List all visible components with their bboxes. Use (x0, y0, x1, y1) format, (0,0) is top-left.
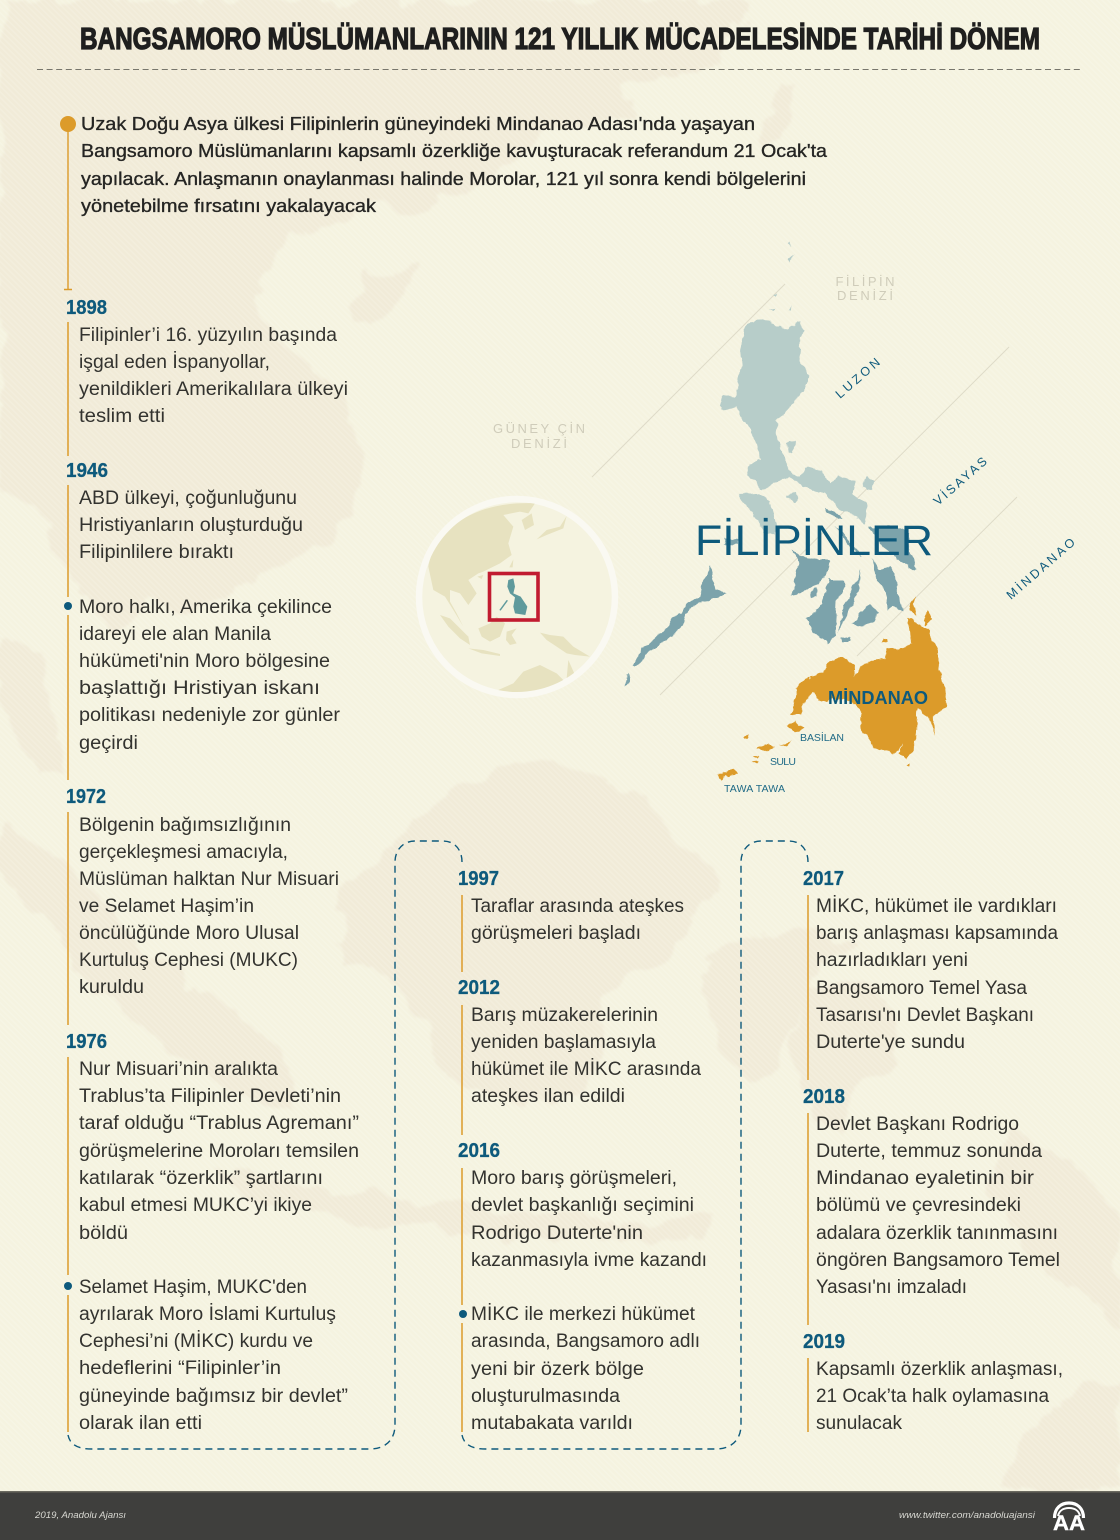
entry 1898: teslim etti (79, 406, 165, 427)
entry 2018 (803, 1086, 1060, 1298)
entry 2017: 2017 (803, 868, 844, 890)
entry 1898 (66, 297, 348, 427)
entry 1976: Nur Misuari’nin aralıkta (79, 1059, 278, 1080)
entry Selamet Haşim: güneyinde bağımsız bir devlet” (79, 1386, 348, 1407)
timeline column 2 (458, 868, 707, 1434)
entry 1946: ABD ülkeyi, çoğunluğunu (79, 488, 297, 509)
entry 2016: Moro barış görüşmeleri, (471, 1168, 677, 1189)
entry 1972: kuruldu (79, 977, 144, 998)
connector: dashed path from second to third column (462, 841, 808, 1449)
entry 2019: 2019 (803, 1331, 845, 1353)
entry 2012: yeniden başlamasıyla (471, 1032, 656, 1053)
entry 2018: Yasası'nı imzaladı (816, 1277, 967, 1298)
entry 2019: sunulacak (816, 1413, 902, 1434)
entry 2012: 2012 (458, 977, 500, 999)
entry 1976: görüşmelerine Moroları temsilen (79, 1141, 359, 1162)
entry MİKC: MİKC ile merkezi hükümet (471, 1304, 696, 1325)
entry 1898: yenildikleri Amerikalılara ülkeyi (79, 379, 348, 400)
inset mini map (499, 578, 527, 615)
entry 2019 (803, 1331, 1063, 1434)
region label: Mindanao rotated: MİNDANAO (1004, 535, 1078, 602)
entry MİKC: mutabakata varıldı (471, 1413, 633, 1434)
entry Selamet Haşim: Cephesi’ni (MİKC) kurdu ve (79, 1331, 313, 1352)
entry Moro halkı (64, 597, 341, 754)
footer credit: 2019, Anadolu Ajansı (34, 1510, 126, 1521)
entry 2017: Tasarısı'nı Devlet Başkanı (816, 1005, 1034, 1026)
entry 2017: Duterte'ye sundu (816, 1032, 965, 1053)
intro text with marker: Bangsamoro Müslümanlarını kapsamlı özerkliğe kavuşturacak referandum 21 Ocak'ta (81, 140, 828, 161)
island labels: SULU (770, 756, 796, 768)
entry 1972 (66, 786, 339, 998)
entry 2012: hükümet ile MİKC arasında (471, 1059, 701, 1080)
entry 2016 (458, 1140, 707, 1271)
entry 1976: böldü (79, 1223, 128, 1244)
red locator frame (490, 574, 538, 620)
timeline column 1 (64, 297, 359, 1434)
sea label: Güney Çin Denizi: GÜNEY ÇİN (493, 421, 585, 436)
entry 2012 (458, 977, 701, 1107)
entry 2017 (803, 868, 1058, 1053)
sea label: Filipin Denizi: FİLİPİN (836, 274, 894, 289)
entry 1946: Filipinlilere bıraktı (79, 542, 234, 563)
entry 2016: 2016 (458, 1140, 500, 1162)
entry 2017: barış anlaşması kapsamında (816, 923, 1058, 944)
entry 1997 (458, 868, 684, 944)
sea label: Filipin Denizi (836, 274, 894, 303)
entry 1946: 1946 (66, 460, 108, 482)
entry 1997: Taraflar arasında ateşkes (471, 896, 684, 917)
entry 1946: Hristiyanların oluşturduğu (79, 515, 303, 536)
entry Selamet Haşim (64, 1277, 348, 1434)
entry 2012: Barış müzakerelerinin (471, 1005, 658, 1026)
entry 2018: Mindanao eyaletinin bir (816, 1168, 1035, 1189)
footer url: www.twitter.com/anadoluajansi (899, 1510, 1036, 1521)
intro text with marker: Uzak Doğu Asya ülkesi Filipinlerin güneyindeki Mindanao Adası'nda yaşayan (81, 113, 755, 134)
intro text with marker: yapılacak. Anlaşmanın onaylanması halinde Morolar, 121 yıl sonra kendi bölgelerini (81, 168, 806, 189)
entry 1972: Bölgenin bağımsızlığının (79, 815, 291, 836)
locator globe (419, 499, 615, 695)
entry 1946 (66, 460, 303, 563)
entry 2017: MİKC, hükümet ile vardıkları (816, 896, 1057, 917)
Mindanao region (718, 597, 947, 781)
sea label: Filipin Denizi: DENİZİ (837, 288, 893, 303)
entry 2018: adalara özerklik tanınmasını (816, 1223, 1058, 1244)
entry 1972: 1972 (66, 786, 106, 808)
entry Selamet Haşim: Selamet Haşim, MUKC'den (79, 1277, 307, 1298)
sea label: Güney Çin Denizi (493, 421, 585, 451)
country label: Filipinler: FİLİPİNLER (695, 517, 933, 565)
footer bar (0, 1491, 1120, 1540)
entry Moro halkı: başlattığı Hristiyan iskanı (79, 678, 320, 699)
entry MİKC: oluşturulmasında (471, 1386, 620, 1407)
sea label: Güney Çin Denizi: DENİZİ (511, 436, 567, 451)
intro text with marker: yönetebilme fırsatını yakalayacak (81, 195, 377, 216)
region label: Luzon: LUZON (833, 355, 883, 401)
entry 2017: hazırladıkları yeni (816, 950, 968, 971)
entry 1972: gerçekleşmesi amacıyla, (79, 842, 288, 863)
entry 1976: 1976 (66, 1031, 107, 1053)
entry 2016: devlet başkanlığı seçimini (471, 1195, 694, 1216)
entry Selamet Haşim: hedeflerini “Filipinler’in (79, 1358, 281, 1379)
entry 2016: kazanmasıyla ivme kazandı (471, 1250, 707, 1271)
entry Moro halkı: geçirdi (79, 733, 138, 754)
intro text with marker (60, 113, 828, 290)
entry 1976: Trablus’ta Filipinler Devleti’nin (79, 1086, 341, 1107)
entry 2017: Bangsamoro Temel Yasa (816, 978, 1027, 999)
entry 2018: Devlet Başkanı Rodrigo (816, 1114, 1019, 1135)
entry 2019: 21 Ocak’ta halk oylamasına (816, 1386, 1049, 1407)
Luzon region (718, 242, 873, 536)
icon: AA logo: AA (1053, 1512, 1085, 1535)
connector: dashed path from first to second column (68, 841, 462, 1449)
Visayas and Palawan (625, 506, 915, 686)
entry 1976 (66, 1031, 359, 1244)
entry Selamet Haşim: olarak ilan etti (79, 1413, 202, 1434)
entry MİKC: yeni bir özerk bölge (471, 1359, 644, 1380)
entry 1976: taraf olduğu “Trablus Agremanı” (79, 1113, 359, 1134)
entry 2018: öngören Bangsamoro Temel (816, 1250, 1060, 1271)
entry 1972: Kurtuluş Cephesi (MUKC) (79, 950, 298, 971)
entry MİKC: arasında, Bangsamoro adlı (471, 1331, 700, 1352)
entry 2018: Duterte, temmuz sonunda (816, 1141, 1042, 1162)
entry Moro halkı: hükümeti'nin Moro bölgesine (79, 651, 330, 672)
entry 1997: 1997 (458, 868, 499, 890)
entry 2019: Kapsamlı özerklik anlaşması, (816, 1359, 1063, 1380)
entry 1976: katılarak “özerklik” şartlarını (79, 1168, 323, 1189)
entry Moro halkı: Moro halkı, Amerika çekilince (79, 597, 332, 618)
entry 1898: işgal eden İspanyollar, (79, 352, 270, 373)
entry 1972: Müslüman halktan Nur Misuari (79, 869, 339, 890)
entry 1976: kabul etmesi MUKC’yi ikiye (79, 1195, 312, 1216)
map: Philippines (625, 242, 947, 781)
entry 1972: ve Selamet Haşim’in (79, 896, 254, 917)
entry 1997: görüşmeleri başladı (471, 923, 641, 944)
entry 2018: bölümü ve çevresindeki (816, 1195, 1021, 1216)
region label: Visayas: VİSAYAS (931, 454, 990, 508)
timeline column 3 (803, 868, 1063, 1434)
entry 1898: 1898 (66, 297, 107, 319)
entry 1972: öncülüğünde Moro Ulusal (79, 923, 299, 944)
entry Selamet Haşim: ayrılarak Moro İslami Kurtuluş (79, 1304, 336, 1325)
island labels (724, 731, 844, 795)
island labels: TAWA TAWA (724, 783, 785, 795)
entry Moro halkı: politikası nedeniyle zor günler (79, 705, 341, 726)
entry 1898: Filipinler’i 16. yüzyılın başında (79, 325, 337, 346)
entry 2012: ateşkes ilan edildi (471, 1086, 625, 1107)
icon: AA logo (1053, 1503, 1085, 1535)
entry 2018: 2018 (803, 1086, 845, 1108)
region label: Mindanao: MİNDANAO (828, 688, 928, 708)
entry 2016: Rodrigo Duterte'nin (471, 1223, 643, 1244)
entry MİKC (459, 1304, 700, 1434)
island labels: BASİLAN (800, 731, 844, 744)
entry Moro halkı: idareyi ele alan Manila (79, 624, 271, 645)
